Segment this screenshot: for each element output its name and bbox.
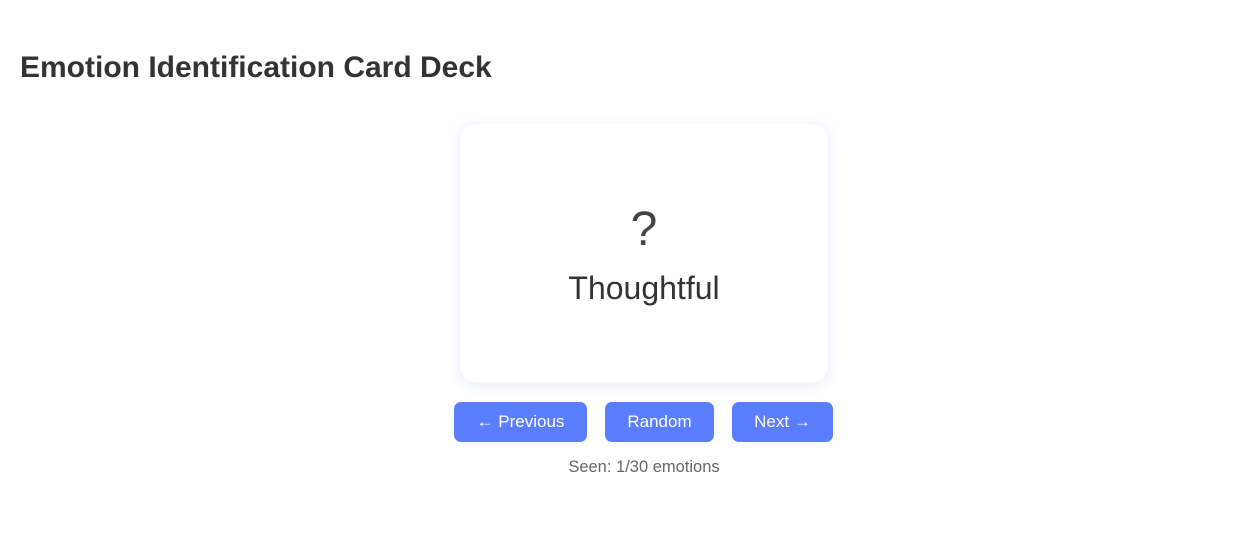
button: random — [605, 402, 714, 442]
button: next: Next → — [754, 412, 811, 431]
button: random: Random — [627, 412, 692, 431]
emotion word: Thoughtful — [568, 270, 720, 306]
button: previous — [454, 402, 587, 442]
button: next — [732, 402, 833, 442]
title: Emotion Identification Card Deck — [20, 51, 492, 84]
button: previous: ← Previous — [477, 412, 564, 431]
card — [460, 124, 828, 382]
icon: question mark: ? — [631, 203, 657, 256]
seen counter: Seen: 1/30 emotions — [568, 458, 720, 476]
